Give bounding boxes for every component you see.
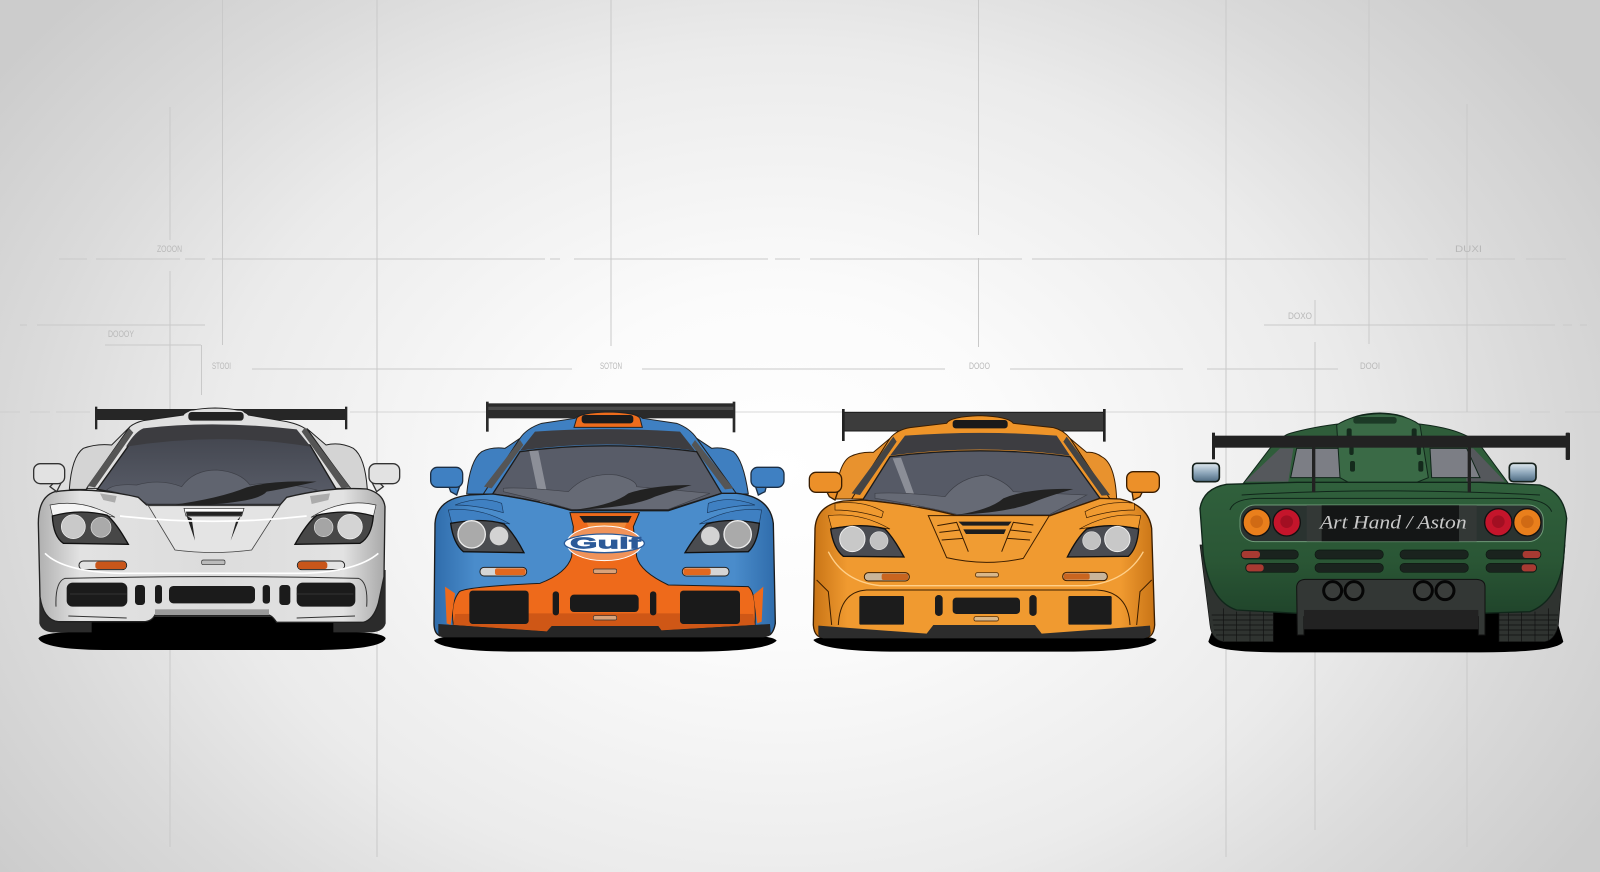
upper body [483, 412, 737, 494]
dimension label: DOOOY [108, 329, 134, 339]
tyre tread [1212, 608, 1558, 642]
hood vent [184, 508, 244, 516]
ground shadow [813, 634, 1157, 652]
orange centre stripe [452, 513, 755, 632]
dimension label: DOXO [1288, 311, 1312, 321]
dimension label: DOOO [969, 361, 990, 371]
badge [202, 560, 225, 565]
mirrors [809, 472, 1159, 500]
sun band [126, 424, 311, 447]
mirrors [1193, 463, 1536, 482]
bonnet shading [100, 493, 330, 504]
licence centre [1322, 505, 1459, 541]
tail panel [1240, 505, 1543, 542]
indicators [864, 572, 1107, 581]
badges [974, 573, 998, 621]
vents [1241, 550, 1541, 572]
dimension label: SOTON [600, 361, 622, 371]
splitter [438, 624, 771, 637]
glass reflection [893, 458, 921, 512]
bumper lines [817, 580, 1152, 625]
intakes [469, 591, 740, 624]
roof scoop [953, 420, 1008, 428]
rear wing [1212, 433, 1570, 492]
intakes [859, 595, 1112, 625]
upper body [1243, 413, 1508, 483]
rear wing [843, 412, 1105, 431]
ground shadow [1208, 608, 1563, 652]
tyres [1200, 545, 1565, 642]
car: Gulf livery McLaren F1 front view [431, 402, 784, 652]
lower orange shading [453, 613, 755, 632]
tail light centres [1250, 515, 1534, 528]
wiper [172, 481, 317, 505]
badges [593, 569, 617, 620]
right headlight [1067, 503, 1141, 557]
hood panel [928, 516, 1049, 562]
glass reflection [529, 451, 550, 507]
tyres [39, 570, 386, 632]
main body [813, 498, 1155, 637]
hood vents [937, 522, 1033, 552]
rear side windows [1245, 448, 1505, 482]
mirrors [431, 467, 784, 495]
Gulf roundel: Gulf [570, 536, 643, 553]
mirrors [34, 464, 400, 492]
sun band [890, 433, 1070, 456]
splitter [818, 625, 1151, 638]
rear arches [467, 438, 748, 494]
main body [1200, 482, 1567, 613]
vent reflectors [1242, 551, 1540, 571]
hood vent [579, 516, 632, 523]
diffuser [1297, 579, 1485, 635]
bumper line [45, 516, 378, 573]
cabin windows [1291, 448, 1480, 478]
right headlight [685, 500, 762, 553]
wiper [573, 485, 692, 510]
licence panel [1307, 505, 1477, 541]
exhausts [1324, 582, 1454, 600]
wiper [956, 489, 1073, 515]
side wedges [445, 587, 763, 625]
wing end plates [842, 409, 1106, 442]
interior outlines [875, 475, 1087, 514]
dimension label: STOOI [212, 361, 231, 371]
lower lip [155, 609, 269, 615]
A-pillars [87, 427, 350, 488]
left headlight [50, 503, 128, 544]
roof scoop [188, 411, 244, 421]
rear wing [486, 402, 735, 432]
indicators [79, 561, 345, 570]
windshield [97, 435, 337, 505]
upper body [87, 408, 351, 488]
engine deck [1337, 414, 1428, 482]
A-pillars [852, 437, 1110, 496]
intakes [67, 583, 355, 607]
Gulf roundel [564, 526, 644, 561]
deck slots [1347, 428, 1423, 472]
A-pillars [484, 440, 733, 489]
left headlight [828, 503, 904, 557]
main body [434, 493, 775, 636]
dimension label: DOOI [1360, 361, 1380, 371]
interior outlines [107, 470, 317, 504]
car: white McLaren F1 front view [34, 407, 400, 650]
hood panel [148, 506, 280, 552]
dimension label: DUXI [1455, 244, 1482, 254]
car: orange McLaren F1 front view [809, 409, 1159, 652]
diffuser channel [1304, 610, 1478, 629]
main body [38, 489, 385, 622]
indicators [480, 567, 729, 576]
signature: Art Hand / Aston [1318, 512, 1467, 533]
deck edge lines [1230, 491, 1552, 512]
sun band [520, 429, 695, 451]
rear wing [95, 407, 347, 429]
left headlight [448, 500, 524, 553]
right headlight [295, 503, 376, 544]
windshield [493, 446, 722, 510]
car: green McLaren F1 rear view [1193, 413, 1570, 652]
tail lights [1243, 509, 1541, 536]
roof scoop [574, 412, 642, 427]
interior outlines [503, 475, 710, 509]
rear arches [69, 427, 367, 489]
dimension label: ZOOON [157, 244, 182, 254]
ground shadow [434, 633, 777, 652]
ground shadow [38, 617, 386, 650]
upper body [852, 416, 1110, 499]
rear arches [835, 438, 1117, 499]
windshield [863, 451, 1100, 516]
roof scoop [1353, 417, 1397, 424]
